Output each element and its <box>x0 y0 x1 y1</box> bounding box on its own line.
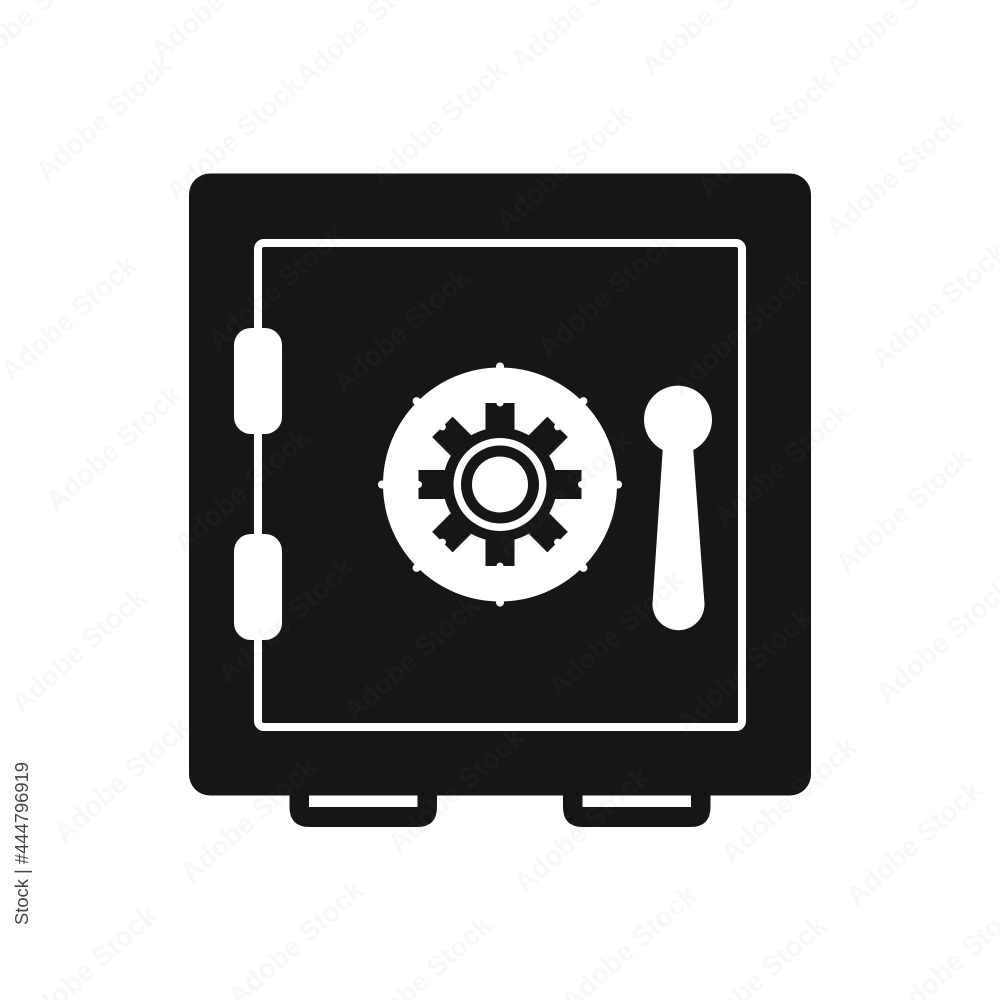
watermark pattern: Adobe Stock <box>175 751 323 889</box>
door hinges <box>234 328 282 640</box>
watermark pattern: Adobe Stock <box>328 261 476 399</box>
watermark pattern: Adobe Stock <box>212 551 360 689</box>
watermark pattern: Adobe Stock <box>168 421 316 559</box>
icon: safe feet <box>290 785 710 827</box>
combination dial <box>378 362 622 606</box>
watermark pattern: Adobe Stock <box>5 581 153 719</box>
safe body <box>189 174 811 796</box>
watermark pattern: Adobe Stock <box>160 69 308 207</box>
watermark pattern: Adobe Stock <box>508 761 656 899</box>
safe handle <box>644 386 712 630</box>
watermark pattern: Adobe Stock <box>40 379 188 517</box>
watermark pattern: Adobe Stock <box>532 226 680 364</box>
watermark pattern: Adobe Stock <box>665 264 813 402</box>
watermark pattern: Adobe Stock <box>820 106 968 244</box>
watermark pattern: Adobe Stock <box>715 731 863 869</box>
watermark pattern: Adobe Stock <box>30 49 178 187</box>
watermark pattern: Adobe Stock <box>48 711 196 849</box>
watermark pattern: Adobe Stock <box>692 66 840 204</box>
watermark pattern: Adobe Stock <box>840 774 988 912</box>
watermark pattern: Adobe Stock <box>830 441 978 579</box>
watermark pattern: Adobe Stock <box>490 99 638 237</box>
watermark pattern: Adobe Stock <box>382 721 530 859</box>
watermark pattern: Adobe Stock <box>542 564 690 702</box>
dial marker nubs <box>378 362 622 606</box>
watermark pattern: Adobe Stock <box>338 589 486 727</box>
watermark pattern: Adobe Stock <box>365 54 513 192</box>
watermark pattern: Adobe Stock <box>490 424 638 562</box>
stock ID caption: Stock | #444796919 <box>12 762 32 925</box>
safe door frame <box>258 243 742 727</box>
watermark pattern: Adobe Stock <box>708 396 856 534</box>
watermark pattern: Adobe Stock <box>202 219 350 357</box>
icon: gear <box>415 400 585 570</box>
watermark pattern: Adobe Stock <box>670 601 818 739</box>
